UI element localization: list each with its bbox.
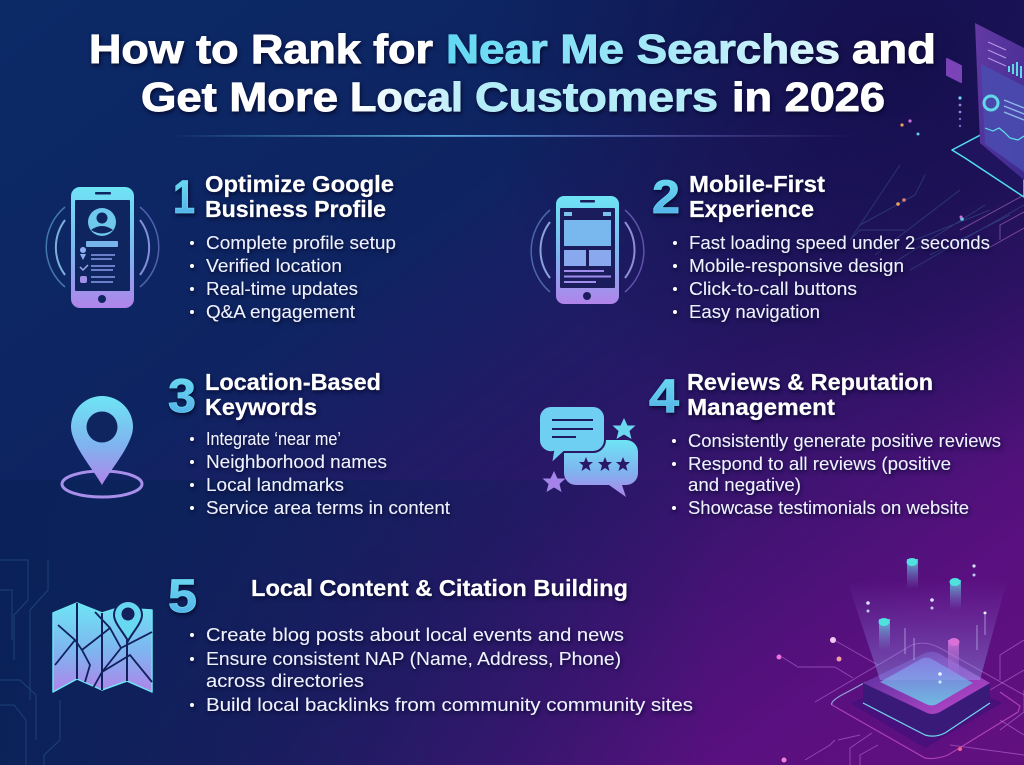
title: How to Rank for [89,26,433,72]
section 2 text: Easy navigation [689,302,820,322]
illustration: glowing data platform [776,558,1024,765]
section 1 text: Complete profile setup [206,233,396,253]
section 2 text: 2 [652,170,680,223]
section 4 text: Respond to all reviews (positive [688,454,951,474]
section 5 text: Create blog posts about local events and news [206,625,624,645]
title: Get More [141,74,338,120]
section 5 text: 5 [168,569,197,622]
section 4 text: Management [687,394,835,420]
icon: folded map with pin [53,601,152,692]
section 2 text: Click-to-call buttons [689,279,857,299]
section 4 text [649,369,1001,518]
section 5 text: Local Content & Citation Building [251,575,628,601]
section 1 text [173,170,396,322]
section 2 text: Fast loading speed under 2 seconds [689,233,990,253]
title: Near Me Searches [446,26,840,72]
section 4 text: Consistently generate positive reviews [688,431,1001,451]
section 3 text: Service area terms in content [206,498,450,518]
section 1 text: Real-time updates [206,279,358,299]
icon: review bubbles [539,406,638,497]
title: Customers [475,74,718,120]
section 4 text: and negative) [688,475,801,495]
title: and [852,26,936,72]
section 5 text [168,569,693,715]
section 4 text: Reviews & Reputation [687,369,933,395]
section 3 text: Location-Based [205,369,381,395]
section 1 text: Business Profile [205,196,386,222]
title: Local [350,74,463,120]
section 3 text: 3 [168,369,196,422]
section 3 text: Keywords [205,394,317,420]
title: in 2026 [732,74,885,120]
section 5 text: Ensure consistent NAP (Name, Address, Phone) [206,649,621,669]
section 4 text: 4 [649,369,679,422]
section 5 text: Build local backlinks from community community sites [206,695,693,715]
section 2 text [652,170,990,322]
icon: location pin [62,396,142,497]
circuit lines: left [0,560,60,765]
section 3 text: Integrate ‘near me’ [206,429,341,449]
section 1 text: 1 [173,170,195,223]
section 3 text: Local landmarks [206,475,344,495]
section 1 text: Q&A engagement [206,302,355,322]
section 2 text: Mobile-First [689,171,825,197]
section 1 text: Verified location [206,256,342,276]
section 1 text: Optimize Google [205,171,394,197]
icon: phone with profile [46,187,159,308]
illustration: laptop dashboard [850,23,1024,270]
icon: phone with layout [531,196,644,304]
section 4 text: Showcase testimonials on website [688,498,969,518]
section 3 text: Neighborhood names [206,452,387,472]
section 3 text [168,369,450,518]
title [89,26,936,120]
section 5 text: across directories [206,671,364,691]
section 2 text: Experience [689,196,814,222]
section 2 text: Mobile-responsive design [689,256,904,276]
